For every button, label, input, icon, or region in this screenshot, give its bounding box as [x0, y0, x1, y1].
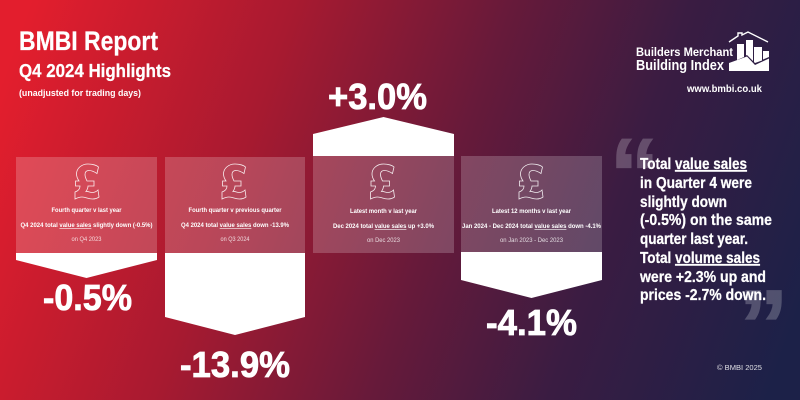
panel text: Fourth quarter v last year: [52, 208, 122, 214]
panel background: [461, 156, 602, 252]
summary text: quarter last year.: [640, 231, 748, 248]
summary text: Total volume sales: [640, 250, 760, 267]
icon: pound: [519, 164, 543, 199]
summary text: Total value sales: [640, 156, 747, 173]
panel: fourth quarter v last year: [16, 157, 157, 318]
quote panel: [610, 118, 788, 382]
panel: fourth quarter v last year: on Q4 2023: [72, 237, 102, 243]
panel background: [16, 157, 157, 253]
panel: latest 12 months v last year: on Jan 2023 - Dec 2023: [500, 238, 564, 244]
panel: latest month v last year: [313, 76, 454, 253]
logo wordmark: Builders Merchant: [636, 45, 733, 59]
value: -13.9%: [180, 344, 290, 385]
summary text: were +2.3% up and: [639, 269, 766, 286]
summary text: prices -2.7% down.: [640, 287, 766, 304]
panel: fourth quarter v previous quarter: [165, 157, 305, 385]
title block: [19, 26, 171, 99]
arrow: down shape: [165, 253, 305, 335]
panel: latest month v last year: Dec 2024 total value sales up +3.0%: [333, 224, 435, 230]
icon: house and bars: [729, 32, 769, 71]
panel: fourth quarter v last year: Q4 2024 total value sales slightly down (-0.5%): [20, 223, 152, 229]
arrow: down shape: [16, 253, 157, 278]
panel text: Latest month v last year: [350, 209, 418, 215]
panel: latest 12 months v last year: Jan 2024 - Dec 2024 total value sales down -4.1%: [462, 224, 602, 230]
panel: latest month v last year: on Dec 2023: [367, 238, 401, 244]
note: (unadjusted for trading days): [19, 88, 141, 99]
logo: Builders Merchant Building Index: Building Index: [636, 58, 724, 74]
summary text: slightly down: [640, 194, 727, 211]
logo: Builders Merchant Building Index: [636, 32, 769, 74]
panel: latest 12 months v last year: [461, 156, 602, 343]
title: BMBI Report: [19, 26, 158, 56]
icon: opening quote: “: [610, 118, 660, 230]
icon: pound: [370, 164, 394, 199]
value: -4.1%: [486, 302, 577, 343]
panel text: Latest 12 months v last year: [492, 209, 572, 215]
summary text: [639, 156, 772, 304]
arrow: up shape: [313, 117, 454, 156]
panel background: [165, 157, 305, 253]
panel text: Fourth quarter v previous quarter: [188, 208, 282, 214]
arrow: down shape: [461, 252, 602, 298]
icon: pound: [222, 164, 246, 199]
panel: fourth quarter v previous quarter: Q4 2024 total value sales down -13.9%: [181, 223, 290, 229]
icon: closing quote: ”: [738, 270, 788, 382]
copyright: © BMBI 2025: [717, 363, 762, 372]
subtitle: Q4 2024 Highlights: [19, 61, 171, 81]
summary text: (-0.5%) on the same: [640, 212, 772, 229]
panel: fourth quarter v previous quarter: on Q3 2024: [220, 237, 250, 243]
icon: pound: [75, 164, 99, 199]
panel background: [313, 156, 454, 253]
value: -0.5%: [43, 277, 132, 318]
website url: www.bmbi.co.uk: [686, 83, 762, 95]
summary text: in Quarter 4 were: [640, 175, 752, 192]
value: +3.0%: [328, 76, 427, 117]
